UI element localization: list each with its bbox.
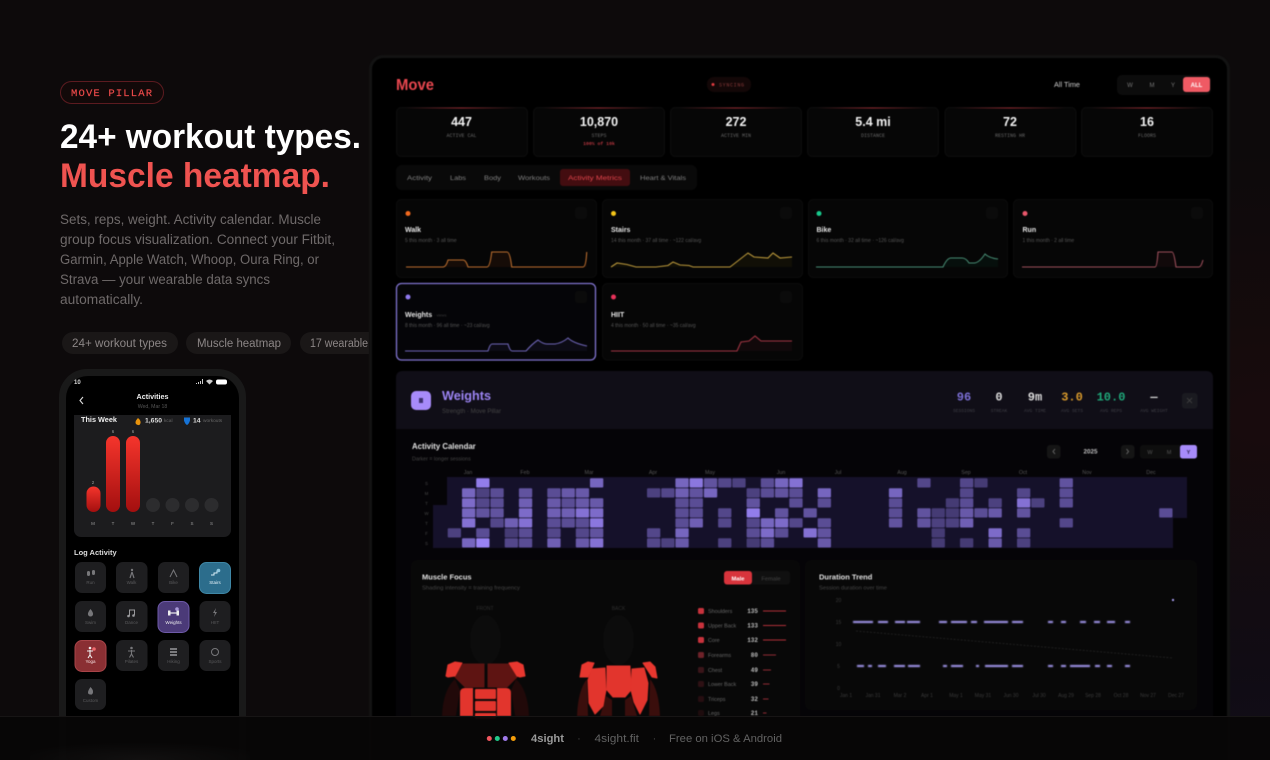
y axis labels: 0 bbox=[837, 686, 840, 692]
stat: distance bbox=[808, 108, 938, 156]
legend: core: Core bbox=[708, 638, 720, 644]
duration trend panel bbox=[805, 560, 1197, 710]
stat: resting hr bbox=[945, 108, 1076, 156]
tile: hiking bbox=[158, 640, 189, 671]
legend: lower back: 39 bbox=[751, 681, 758, 688]
title bbox=[60, 118, 361, 195]
legend: forearms: 80 bbox=[751, 652, 758, 659]
activity card: walk bbox=[396, 200, 596, 278]
feature chips: Muscle heatmap bbox=[197, 338, 281, 350]
x axis labels: Jan 31 bbox=[865, 693, 881, 699]
stat: active min bbox=[670, 108, 802, 156]
activity calendar: Sep bbox=[961, 470, 971, 476]
activity card: stairs: Stairs bbox=[611, 227, 631, 234]
detail header: — bbox=[1149, 390, 1158, 404]
body: back view bbox=[577, 606, 660, 716]
weights detail panel bbox=[396, 371, 1213, 760]
activity calendar: T bbox=[425, 501, 428, 506]
weekly bar chart: 14 bbox=[193, 418, 201, 424]
tile: walk bbox=[116, 562, 148, 593]
tab bar: Body bbox=[484, 175, 502, 182]
stat: active cal: 447 bbox=[451, 115, 472, 129]
footer bar: · bbox=[653, 733, 656, 745]
description text: Sets, reps, weight. Activity calendar. Muscle bbox=[60, 212, 321, 227]
activity calendar: Darker = longer sessions bbox=[412, 456, 471, 462]
tile: swim bbox=[75, 601, 106, 632]
weekly bar chart: 6 bbox=[112, 429, 115, 434]
detail header: AVG REPS bbox=[1100, 408, 1122, 414]
tab bar: Workouts bbox=[518, 175, 551, 182]
badge: move pillar bbox=[60, 82, 164, 104]
x axis labels: Nov 27 bbox=[1140, 693, 1156, 699]
legend: legs: Legs bbox=[708, 711, 720, 717]
description text: automatically. bbox=[60, 292, 143, 307]
weekly bar chart: kcal bbox=[164, 418, 173, 424]
description text bbox=[60, 212, 335, 307]
time range selector: W bbox=[1127, 83, 1133, 89]
description text: Garmin, Apple Watch, Whoop, Oura Ring, or bbox=[60, 252, 319, 267]
stat: floors: FLOORS bbox=[1138, 133, 1156, 139]
stat: distance: DISTANCE bbox=[861, 133, 885, 139]
tab bar: Activity bbox=[407, 175, 433, 182]
activity calendar: Nov bbox=[1082, 470, 1092, 476]
description text: group focus visualization. Connect your Fitbit, bbox=[60, 232, 335, 247]
status bar: 10 bbox=[74, 380, 81, 386]
tile: run bbox=[75, 562, 106, 593]
legend: forearms: Forearms bbox=[708, 653, 731, 659]
badge: move pillar: MOVE PILLAR bbox=[71, 88, 153, 100]
calendar controls: 2025 bbox=[1083, 448, 1098, 456]
x axis labels bbox=[840, 693, 1184, 699]
activity card: hiit: HIIT bbox=[611, 312, 625, 319]
stat: active min: 272 bbox=[726, 115, 746, 129]
feature chips bbox=[62, 332, 369, 354]
x axis labels: Jul 30 bbox=[1032, 693, 1046, 699]
legend: chest bbox=[698, 667, 771, 674]
tile: yoga: Yoga bbox=[85, 659, 96, 664]
stat: distance: 5.4 mi bbox=[855, 115, 891, 129]
duration trend panel: Session duration over time bbox=[819, 586, 887, 592]
weekly bar chart: S bbox=[190, 521, 194, 526]
legend: chest: Chest bbox=[708, 668, 723, 674]
calendar controls bbox=[1047, 445, 1197, 458]
legend: legs bbox=[698, 710, 766, 717]
body: front view: FRONT bbox=[476, 606, 494, 612]
tab bar bbox=[396, 165, 697, 190]
trend line bbox=[856, 631, 1173, 658]
legend: chest: 49 bbox=[751, 667, 758, 674]
tile: bike bbox=[158, 562, 189, 593]
legend: shoulders: Shoulders bbox=[708, 609, 733, 615]
activity card: stairs bbox=[602, 200, 802, 278]
activity card: walk: Walk bbox=[405, 227, 421, 234]
tile: dance: Dance bbox=[125, 620, 138, 625]
activity calendar: Activity Calendar bbox=[412, 442, 476, 451]
detail header: 9m bbox=[1028, 390, 1042, 404]
legend: upper back: 133 bbox=[747, 622, 758, 630]
muscle focus panel bbox=[411, 560, 800, 750]
calendar controls: Y bbox=[1187, 450, 1191, 456]
tile: sports bbox=[200, 640, 230, 671]
footer bar: · bbox=[577, 733, 581, 745]
activity card: weights (selected): 8 this month · 96 all time · ~23 cal/avg bbox=[405, 323, 490, 329]
activity card: weights (selected): Weights bbox=[405, 312, 432, 319]
icon: weights bbox=[411, 391, 431, 410]
detail header: AVG TIME bbox=[1024, 408, 1046, 414]
tab bar: Activity Metrics bbox=[568, 175, 623, 182]
weekly bar chart bbox=[74, 415, 231, 537]
activity calendar: Jul bbox=[835, 470, 841, 476]
close button bbox=[1182, 393, 1198, 408]
activity calendar: S bbox=[425, 541, 428, 546]
weekly bar chart: workouts bbox=[203, 418, 223, 424]
weekly bar chart: M bbox=[91, 521, 95, 526]
body: back view: BACK bbox=[612, 606, 626, 612]
status bar bbox=[74, 379, 227, 386]
dashboard screenshot panel bbox=[370, 56, 1228, 760]
weekly bar chart: T bbox=[152, 521, 155, 526]
activity card: stairs: 14 this month · 37 all time · ~122 cal/avg bbox=[611, 238, 701, 244]
calendar controls: M bbox=[1167, 450, 1172, 456]
detail header: Weights bbox=[442, 388, 491, 403]
weekly bar chart: S bbox=[210, 521, 213, 526]
activity calendar: Apr bbox=[649, 470, 657, 476]
activity card: bike: Bike bbox=[816, 227, 831, 234]
activity calendar: S bbox=[425, 481, 428, 486]
stat: floors: 16 bbox=[1140, 115, 1154, 129]
body: front view bbox=[442, 606, 529, 719]
x axis labels: Jun 30 bbox=[1003, 693, 1019, 699]
y axis labels: 20 bbox=[836, 598, 841, 604]
phone header: Wed, Mar 18 bbox=[138, 404, 167, 410]
feature chips: 24+ workout types bbox=[72, 338, 167, 350]
detail header: AVG WEIGHT bbox=[1140, 408, 1168, 414]
activity card: run: 1 this month · 2 all time bbox=[1022, 238, 1074, 244]
legend: shoulders: 135 bbox=[747, 608, 758, 615]
tile: stairs: Stairs bbox=[209, 580, 221, 585]
tile: custom: Custom bbox=[83, 698, 98, 703]
x axis labels: Mar 2 bbox=[894, 693, 907, 699]
weekly bar chart: 6 bbox=[132, 429, 135, 434]
activity card: weights (selected) bbox=[396, 284, 596, 360]
activity card: bike bbox=[808, 200, 1008, 278]
y axis labels: 5 bbox=[837, 664, 840, 670]
tile: dance bbox=[116, 601, 148, 632]
tile: weights: Weights bbox=[165, 620, 182, 625]
legend: forearms bbox=[698, 652, 776, 659]
detail header: SESSIONS bbox=[953, 408, 975, 414]
weekly bar chart: This Week bbox=[81, 415, 118, 424]
phone header: Activities bbox=[137, 392, 168, 401]
detail header: Strength · Move Pillar bbox=[442, 409, 501, 415]
phone header bbox=[80, 392, 168, 410]
stat: active min: ACTIVE MIN bbox=[721, 133, 751, 139]
app heading: move: Move bbox=[396, 77, 434, 94]
legend: upper back: Upper Back bbox=[708, 624, 736, 630]
stat: steps: 100% of 10k bbox=[583, 141, 615, 147]
footer bar bbox=[0, 716, 1270, 760]
legend: triceps bbox=[698, 696, 768, 703]
legend: core bbox=[698, 637, 786, 644]
footer bar: 4sight.fit bbox=[594, 733, 639, 745]
duration trend panel: Duration Trend bbox=[819, 572, 873, 582]
tile: pilates: Pilates bbox=[125, 659, 139, 664]
legend: lower back: Lower Back bbox=[708, 682, 736, 688]
time range selector: M bbox=[1150, 83, 1154, 89]
syncing pill: SYNCING bbox=[719, 82, 744, 88]
detail header: AVG SETS bbox=[1061, 408, 1083, 414]
activity calendar: Aug bbox=[897, 470, 907, 476]
activity calendar: F bbox=[425, 531, 428, 536]
activity card: bike: 6 this month · 32 all time · ~126 cal/avg bbox=[816, 238, 904, 244]
legend: upper back bbox=[698, 622, 786, 630]
stat: floors bbox=[1082, 108, 1212, 156]
activity calendar: Jun bbox=[777, 470, 785, 476]
activity calendar: Mar bbox=[584, 470, 594, 476]
log activity heading: Log Activity bbox=[74, 548, 117, 557]
tab bar: Heart & Vitals bbox=[640, 175, 687, 182]
x axis labels: Aug 29 bbox=[1058, 693, 1074, 699]
activity card: hiit bbox=[602, 284, 802, 360]
activity calendar: T bbox=[425, 521, 428, 526]
description text: Strava — your wearable data syncs bbox=[60, 272, 270, 287]
detail header: STREAK bbox=[991, 408, 1008, 414]
activity card: walk: 5 this month · 3 all time bbox=[405, 238, 457, 244]
activity calendar: May bbox=[705, 470, 715, 476]
time range selector bbox=[1054, 75, 1211, 95]
feature chips: 17 wearable bbox=[310, 338, 368, 350]
legend: core: 132 bbox=[747, 637, 758, 644]
weekly bar chart: W bbox=[131, 521, 136, 526]
y axis labels: 15 bbox=[836, 620, 841, 626]
legend: triceps: 32 bbox=[751, 696, 758, 703]
activity card: run: Run bbox=[1022, 227, 1036, 234]
tile: run: Run bbox=[86, 580, 95, 585]
gender toggle: Male bbox=[732, 576, 745, 582]
muscle focus panel: Muscle Focus bbox=[422, 572, 472, 582]
tile: pilates bbox=[116, 640, 148, 671]
time range selector: All Time bbox=[1054, 80, 1080, 89]
x axis labels: Sep 28 bbox=[1085, 693, 1101, 699]
activity calendar bbox=[412, 442, 1197, 548]
y axis labels: 10 bbox=[836, 642, 841, 648]
activity calendar: Feb bbox=[520, 470, 530, 476]
title: 24+ workout types. bbox=[60, 118, 361, 156]
tile: hiking: Hiking bbox=[167, 659, 180, 664]
tile: custom bbox=[75, 679, 106, 710]
activity card: weights (selected): · views bbox=[434, 312, 446, 318]
weekly bar chart: F bbox=[171, 521, 174, 526]
stat: resting hr: 72 bbox=[1003, 115, 1017, 129]
x axis labels: Apr 1 bbox=[921, 693, 933, 699]
footer bar: 4sight bbox=[531, 733, 564, 745]
session dots bbox=[853, 622, 1130, 666]
legend: legs: 21 bbox=[751, 710, 758, 717]
x axis labels: Jan 1 bbox=[840, 693, 852, 699]
detail header bbox=[396, 371, 1213, 429]
phone mockup bbox=[59, 369, 246, 716]
legend: shoulders bbox=[698, 608, 786, 615]
x axis labels: May 1 bbox=[949, 693, 963, 699]
stat cards row bbox=[396, 108, 1212, 156]
tab bar: Labs bbox=[450, 175, 467, 182]
tile: weights bbox=[158, 602, 189, 632]
stat: resting hr: RESTING HR bbox=[995, 133, 1025, 139]
weekly bar chart: T bbox=[112, 521, 115, 526]
activity calendar: Jan bbox=[464, 470, 472, 476]
tile: swim: Swim bbox=[85, 620, 96, 625]
stat: steps: STEPS bbox=[591, 133, 607, 139]
gender toggle bbox=[724, 571, 790, 584]
tile: hiit: HIIT bbox=[211, 620, 220, 625]
tile: bike: Bike bbox=[169, 580, 178, 585]
stat: active cal bbox=[396, 108, 528, 156]
activity card: run bbox=[1014, 200, 1212, 278]
x axis labels: Oct 28 bbox=[1114, 693, 1129, 699]
footer bar: Free on iOS & Android bbox=[669, 733, 782, 745]
stat: steps: 10,870 bbox=[580, 115, 618, 129]
time range selector: ALL bbox=[1191, 83, 1203, 89]
muscle legend bbox=[698, 608, 786, 717]
legend: lower back bbox=[698, 681, 770, 688]
weekly bar chart: 2 bbox=[92, 480, 95, 485]
tile: stairs bbox=[200, 562, 230, 594]
tile: sports: Sports bbox=[208, 659, 222, 664]
x axis labels: Dec 27 bbox=[1168, 693, 1184, 699]
time range selector: Y bbox=[1171, 83, 1175, 89]
activity calendar: Oct bbox=[1019, 470, 1028, 476]
gender toggle: Female bbox=[761, 576, 781, 582]
detail header: 10.0 bbox=[1097, 390, 1125, 404]
x axis labels: May 31 bbox=[975, 693, 991, 699]
y axis labels bbox=[836, 598, 841, 692]
activity card: hiit: 4 this month · 50 all time · ~35 cal/avg bbox=[611, 323, 696, 329]
detail header: 96 bbox=[957, 390, 971, 404]
stat: active cal: ACTIVE CAL bbox=[446, 133, 477, 139]
title: Muscle heatmap. bbox=[60, 157, 330, 195]
calendar controls: W bbox=[1147, 450, 1153, 456]
tile: hiit bbox=[200, 601, 230, 632]
detail header: 0 bbox=[995, 390, 1003, 404]
activity calendar: M bbox=[425, 491, 429, 496]
tile: yoga bbox=[75, 640, 106, 672]
tile: walk: Walk bbox=[127, 580, 137, 585]
activity calendar: W bbox=[424, 511, 429, 516]
muscle focus panel: Shading intensity = training frequency bbox=[422, 586, 520, 592]
detail header: 3.0 bbox=[1061, 390, 1083, 404]
stat: steps bbox=[534, 108, 664, 156]
legend: triceps: Triceps bbox=[708, 697, 726, 703]
weekly bar chart: 1,650 bbox=[145, 418, 162, 424]
activity calendar: Dec bbox=[1146, 470, 1156, 476]
syncing pill bbox=[707, 77, 751, 92]
brand dots bbox=[487, 736, 516, 741]
